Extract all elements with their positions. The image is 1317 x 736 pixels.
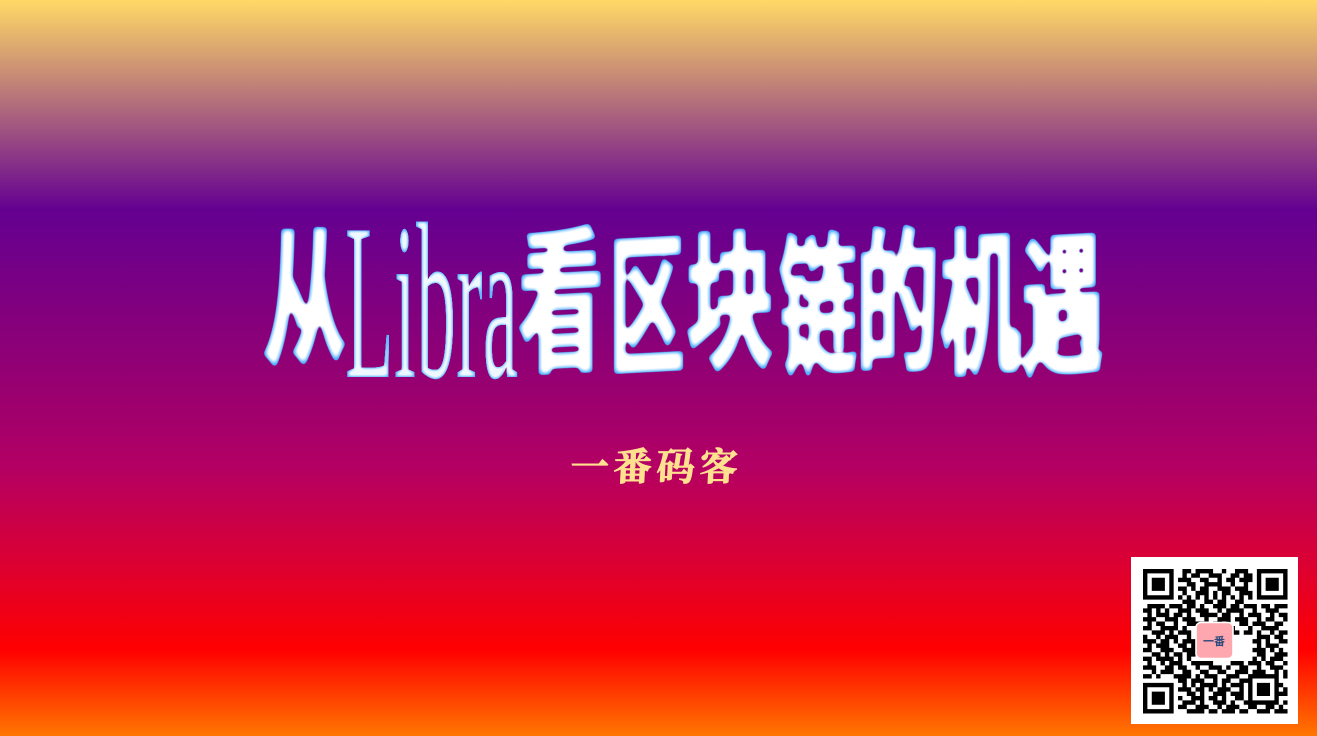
title: Chinese glyphs: 遇 bbox=[1021, 222, 1104, 398]
QR code bbox=[1131, 557, 1298, 724]
title: Chinese glyphs: 链 bbox=[779, 220, 857, 397]
title: Chinese glyphs: 机 bbox=[940, 215, 1021, 397]
title: Chinese glyphs: 从 bbox=[263, 216, 346, 386]
QR modules bbox=[1143, 569, 1288, 714]
QR white background bbox=[1131, 557, 1298, 724]
QR centre logo: 一番 bbox=[1203, 635, 1225, 648]
title: Chinese glyphs: 的 bbox=[856, 214, 939, 395]
subtitle: 一番码客 bbox=[570, 447, 744, 489]
title: Libra: Libra bbox=[345, 179, 518, 426]
QR centre logo bbox=[1196, 622, 1233, 658]
title: Chinese glyphs bbox=[263, 214, 1104, 398]
title bbox=[263, 179, 1104, 426]
title: Chinese glyphs: 区 bbox=[609, 221, 685, 397]
title: Chinese glyphs: 看 bbox=[518, 214, 604, 394]
title: Chinese glyphs: 块 bbox=[686, 219, 774, 392]
